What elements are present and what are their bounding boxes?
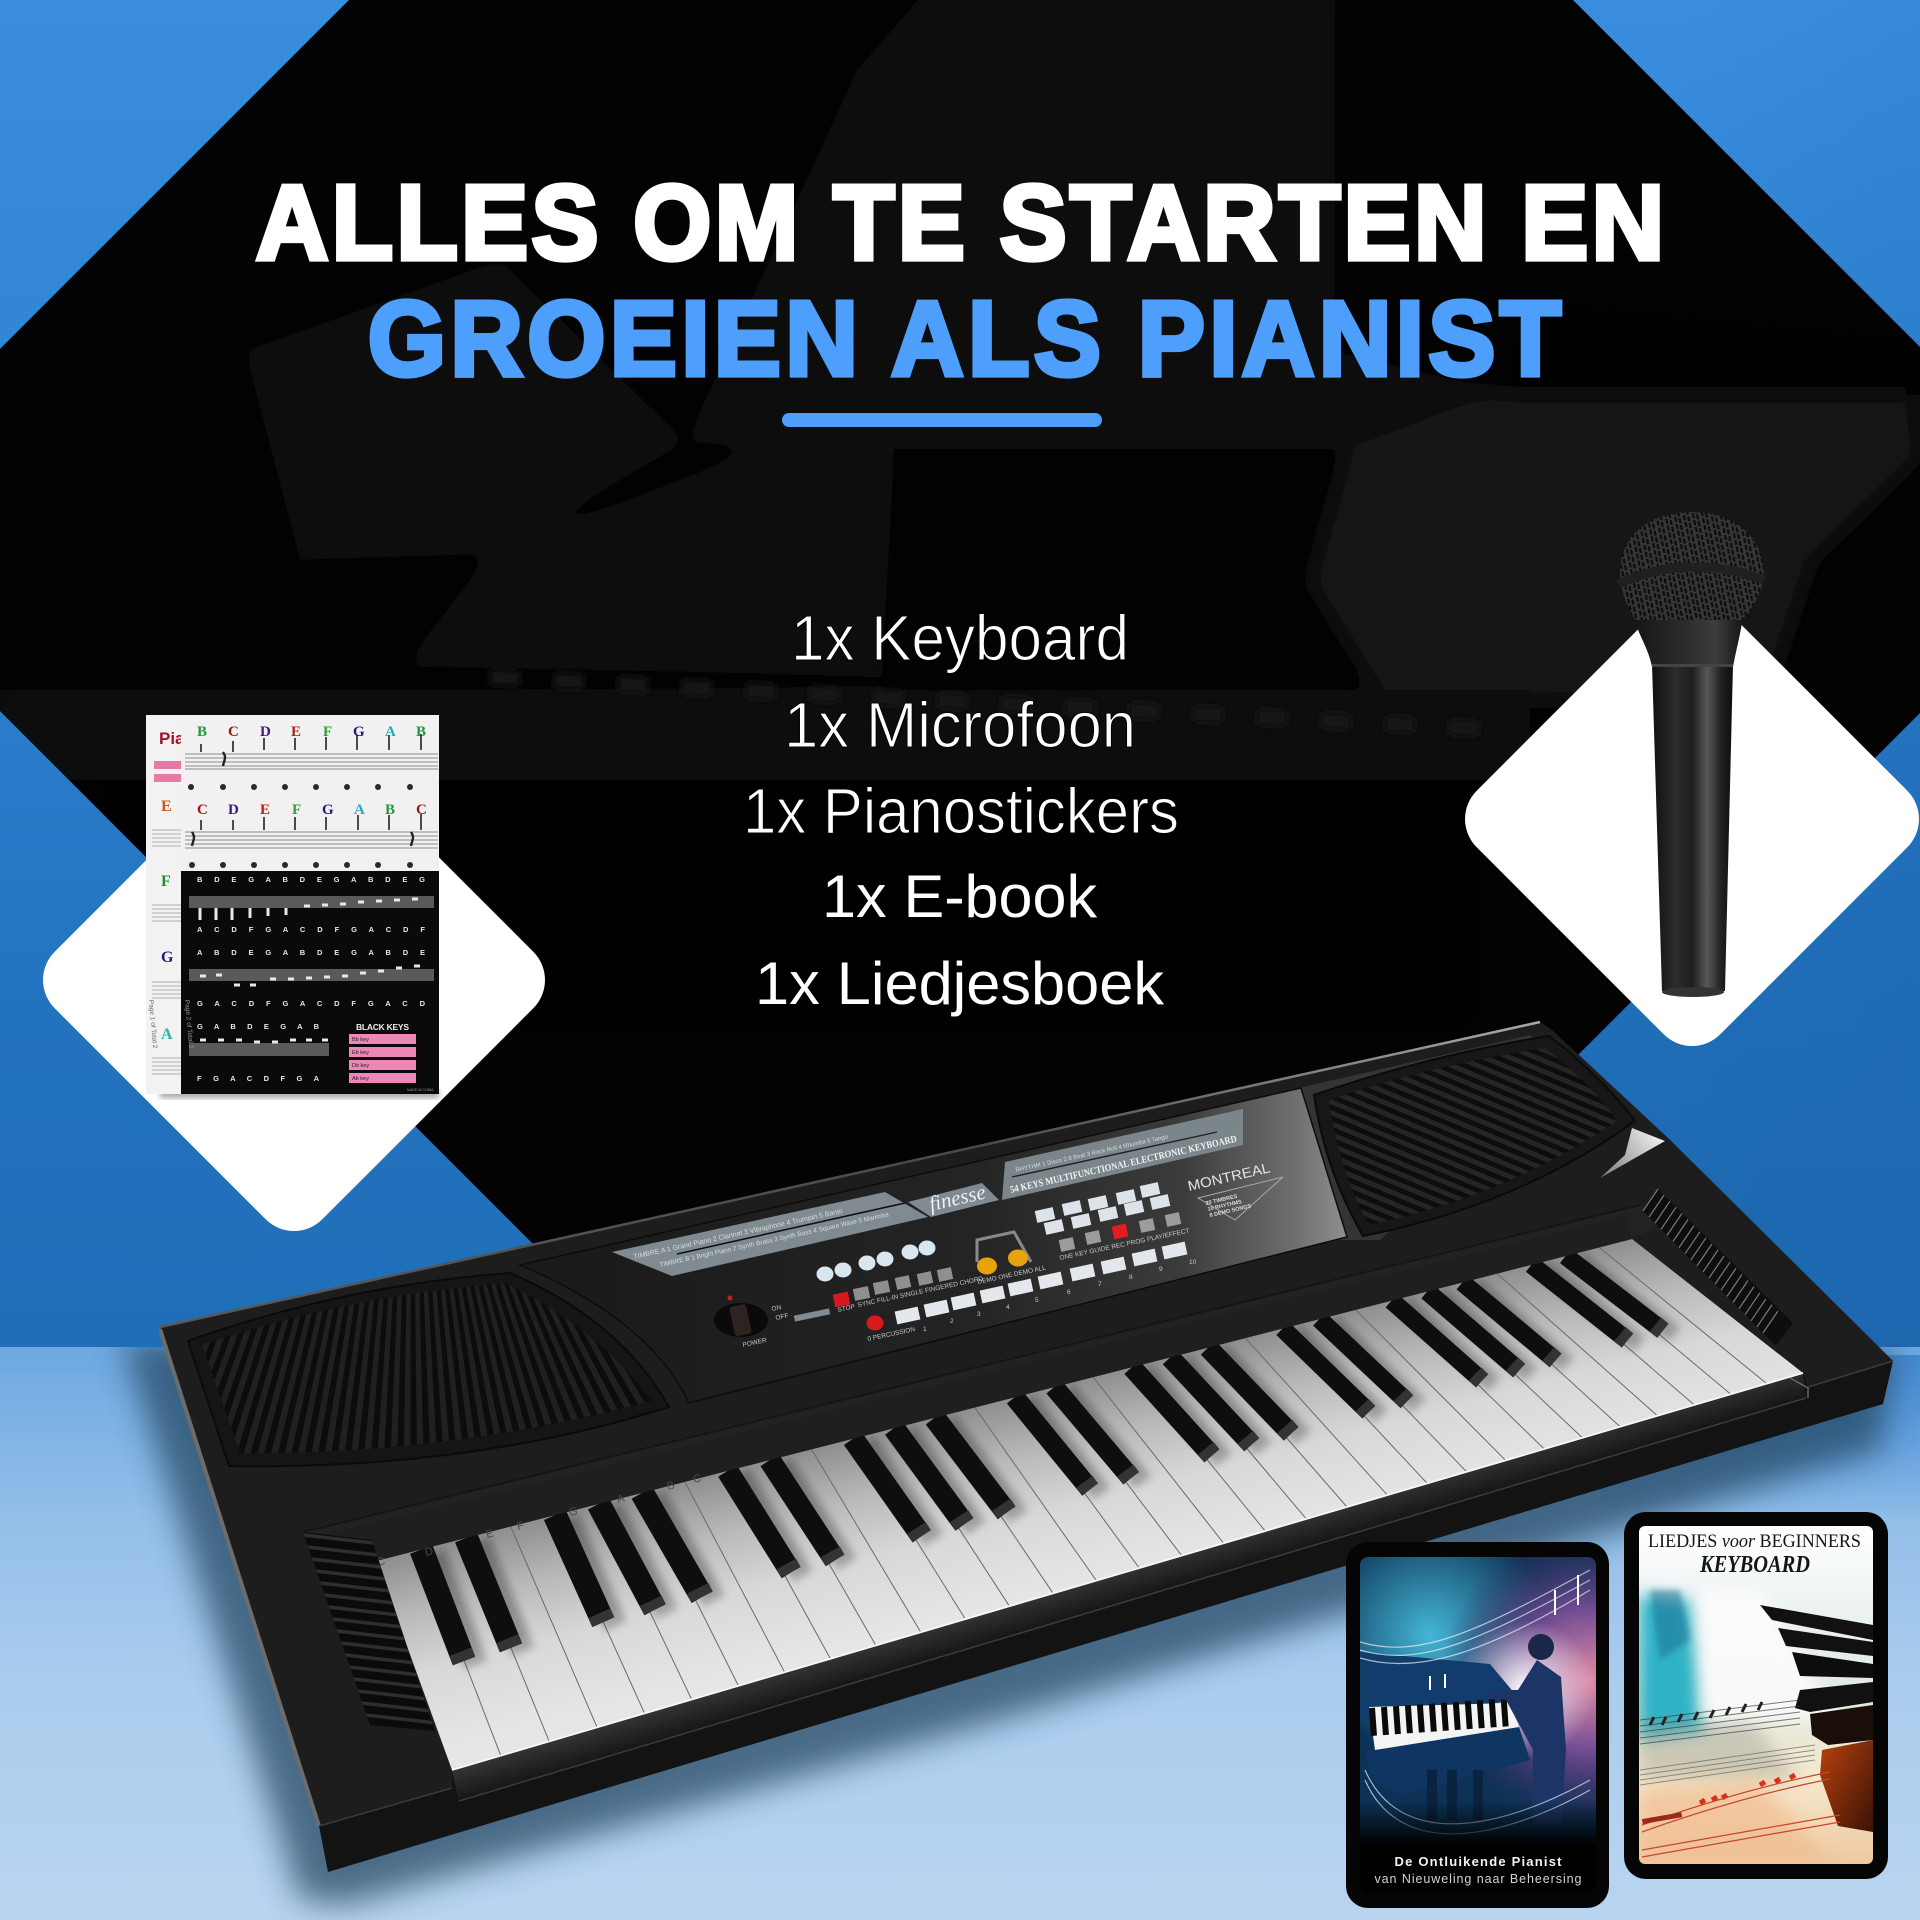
black key shadows (433, 1260, 1675, 1665)
black keys sticker sheet: A B D E G A B D E G A B D E (197, 948, 425, 957)
white treble sticker sheet: D (228, 802, 239, 818)
accompaniment buttons: STOP (837, 1303, 856, 1314)
white treble sticker sheet: C (228, 724, 239, 740)
back sticker sheet (146, 715, 186, 1094)
white treble sticker sheet (181, 715, 439, 871)
power switch (714, 1296, 830, 1349)
MONTREAL logo: 8 DEMO SONGS (1209, 1203, 1252, 1219)
keyboard top surface (160, 1022, 1893, 1826)
control panel (520, 1088, 1347, 1403)
black keys sticker sheet: G A B D E G A B (197, 1022, 320, 1031)
note letters on key cover: G (568, 1505, 579, 1519)
finesse logo (908, 1180, 999, 1217)
white diamond: stickers (83, 769, 505, 1191)
key cover band (303, 1205, 1660, 1561)
pink legend labels (349, 1034, 416, 1083)
function buttons: ONE KEY GUIDE REC PROG PLAY/EFFECT (1059, 1228, 1190, 1262)
black keys sticker sheet: A C D F G A C D F G A C D F (197, 925, 425, 934)
white treble sticker sheet: F (292, 802, 301, 818)
tablet: liedjesboek (1624, 1512, 1888, 1879)
black keys sticker sheet: F G A C D F G A (197, 1074, 320, 1083)
white treble sticker sheet: E (291, 724, 301, 740)
white treble sticker sheet: F (323, 724, 332, 740)
e-book cover art (1360, 1557, 1596, 1893)
item: e-book: 1x E-book (822, 863, 1098, 930)
white treble sticker sheet: G (353, 724, 365, 740)
note letters on key cover (376, 1472, 702, 1569)
title line 2: GROEIEN ALS PIANIST (368, 279, 1561, 398)
black keys sticker sheet: B D E G A B D E G A B D E G (197, 875, 425, 884)
white treble sticker sheet: C (197, 802, 208, 818)
black keys (421, 1256, 1663, 1661)
keyboard shadow on table (122, 1340, 1895, 1905)
pink legend labels: Ab key (352, 1076, 369, 1082)
white treble sticker sheet: B (385, 802, 395, 818)
right vent (1643, 1189, 1793, 1346)
white treble sticker sheet: C (416, 802, 427, 818)
item: liedjesboek: 1x Liedjesboek (755, 950, 1165, 1017)
pink legend labels: Eb key (352, 1050, 369, 1056)
back sticker sheet: A (161, 1026, 173, 1043)
back sticker sheet: G (161, 949, 174, 966)
mic neck (1632, 606, 1744, 667)
power switch: POWER (742, 1337, 768, 1349)
title line 1: ALLES OM TE STARTEN EN (256, 163, 1664, 282)
back sticker sheet: Pia (159, 729, 185, 748)
MONTREAL logo: MONTREAL (1186, 1159, 1272, 1194)
pink legend labels: Bb key (352, 1037, 369, 1043)
white diamond: microphone (1505, 632, 1879, 1006)
front lip below the keys (319, 1361, 1893, 1826)
timbre label band (612, 1192, 928, 1276)
number buttons: 4 (1006, 1304, 1010, 1311)
keyboard (140, 951, 1893, 1872)
white treble sticker sheet: E (260, 802, 270, 818)
back sticker sheet: Page 1 of Total 2 (147, 1000, 158, 1049)
number buttons: 10 (1189, 1259, 1197, 1266)
accompaniment buttons: SYNC FILL-IN SINGLE FINGERED CHORD (857, 1275, 984, 1309)
timbre label band: TIMBRE B 1 Bright Piano 2 Synth Brass 3 Synth Bass 4 Square Wave 5 Marimba (659, 1211, 890, 1269)
shiny highlight sliver (1600, 1128, 1665, 1178)
grand piano (1360, 1652, 1520, 1720)
note letters on key cover: D (424, 1545, 434, 1559)
pink legend labels: Db key (352, 1063, 369, 1069)
white treble sticker sheet: D (260, 724, 271, 740)
timbre select buttons (1036, 1188, 1169, 1229)
title (256, 163, 1664, 398)
note letters on key cover: B (666, 1479, 676, 1493)
power switch: OFF (775, 1312, 789, 1322)
note letters on key cover: F (516, 1520, 526, 1533)
back sticker sheet: F (161, 873, 171, 890)
key cover band repaint (320, 1216, 1632, 1561)
accompaniment buttons (834, 1273, 984, 1314)
black keys label: BLACK KEYS (356, 1022, 409, 1032)
keyboard body (160, 1022, 1893, 1872)
demo buttons (977, 1232, 1047, 1286)
note letters on key cover: C (376, 1555, 386, 1569)
piano stickers sheets (146, 715, 439, 1098)
top rim highlight (160, 1022, 1540, 1327)
number buttons: 5 (1035, 1297, 1039, 1304)
white treble sticker sheet: G (322, 802, 334, 818)
timbre label band: TIMBRE A 1 Grand Piano 2 Clarinet 3 Vibraphone 4 Trumpet 5 Banjo (633, 1208, 843, 1261)
white treble sticker sheet: B (197, 724, 207, 740)
power switch: ON (771, 1304, 782, 1313)
background: light blue table (0, 1347, 1920, 1920)
back sticker sheet: E (161, 798, 172, 815)
microphone (1618, 512, 1764, 997)
volume and tempo buttons (816, 1240, 936, 1282)
number buttons: 9 (1159, 1266, 1163, 1273)
item: keyboard: 1x Keyboard (791, 602, 1129, 674)
white treble sticker sheet: A (385, 724, 396, 740)
white treble sticker sheet: B (416, 724, 426, 740)
mic handle (1652, 664, 1733, 991)
black keys sticker sheet: Page 2 of Total 2 (183, 1000, 194, 1049)
background: blue wall (0, 0, 1920, 1347)
rhythm label band: RHYTHM 1 Disco 2 8 Beat 3 Rock Roll 4 Rhumba 5 Tango (1015, 1134, 1169, 1174)
number buttons (866, 1248, 1197, 1343)
black keys sticker sheet: G A C D F G A C D F G A C D (197, 999, 426, 1008)
e-book title: De Ontluikende Pianist (1394, 1854, 1562, 1869)
finesse logo: finesse (927, 1180, 988, 1216)
model line: 54 KEYS MULTIFUNCTIONAL ELECTRONIC KEYBOARD (1009, 1134, 1238, 1196)
number buttons: 7 (1098, 1281, 1102, 1288)
songbook title: LIEDJES voor BEGINNERS (1648, 1531, 1861, 1552)
item: pianostickers: 1x Pianostickers (743, 775, 1179, 847)
MONTREAL logo (1186, 1159, 1283, 1220)
demo buttons: DEMO ONE DEMO ALL (977, 1265, 1047, 1286)
note letters on key cover: C (692, 1472, 702, 1486)
white keys (376, 1239, 1803, 1770)
MONTREAL logo: 20 TIMBRES (1205, 1194, 1238, 1207)
MONTREAL logo: 10 RHYTHMS (1207, 1199, 1243, 1213)
e-book subtitle: van Nieuweling naar Beheersing (1374, 1872, 1582, 1886)
left vent (304, 1532, 435, 1731)
black hexagon with faint pianist photo (0, 0, 1920, 1244)
pianist silhouette (1528, 1634, 1554, 1660)
black keys sticker sheet: MADE IN CHINA (407, 1088, 434, 1092)
rhythm label band (1002, 1109, 1243, 1200)
right speaker (1313, 1035, 1636, 1237)
songbook cover art (1639, 1526, 1873, 1864)
flowing staff lines (1360, 1570, 1590, 1834)
black keys sticker sheet (181, 871, 439, 1094)
number buttons: 1 (923, 1326, 927, 1333)
songbook subtitle: KEYBOARD (1699, 1552, 1810, 1578)
note letters on key cover: A (616, 1492, 626, 1506)
grey side edge (160, 1329, 319, 1826)
note letters on key cover: E (485, 1527, 495, 1541)
title underline bar (782, 413, 1102, 427)
white treble sticker sheet: A (354, 802, 365, 818)
number buttons: 6 (1067, 1289, 1071, 1296)
number buttons: 2 (950, 1318, 954, 1325)
left speaker (187, 1272, 670, 1468)
number buttons: 0 PERCUSSION (867, 1326, 916, 1343)
product list (743, 602, 1179, 1017)
number buttons: 8 (1129, 1274, 1133, 1281)
mic grill (1620, 512, 1764, 620)
number buttons: 3 (977, 1311, 981, 1318)
item: microfoon: 1x Microfoon (784, 689, 1136, 761)
sheet music (1640, 1700, 1800, 1744)
piano keys (1760, 1605, 1873, 1640)
tablet: e-book (1346, 1542, 1609, 1908)
